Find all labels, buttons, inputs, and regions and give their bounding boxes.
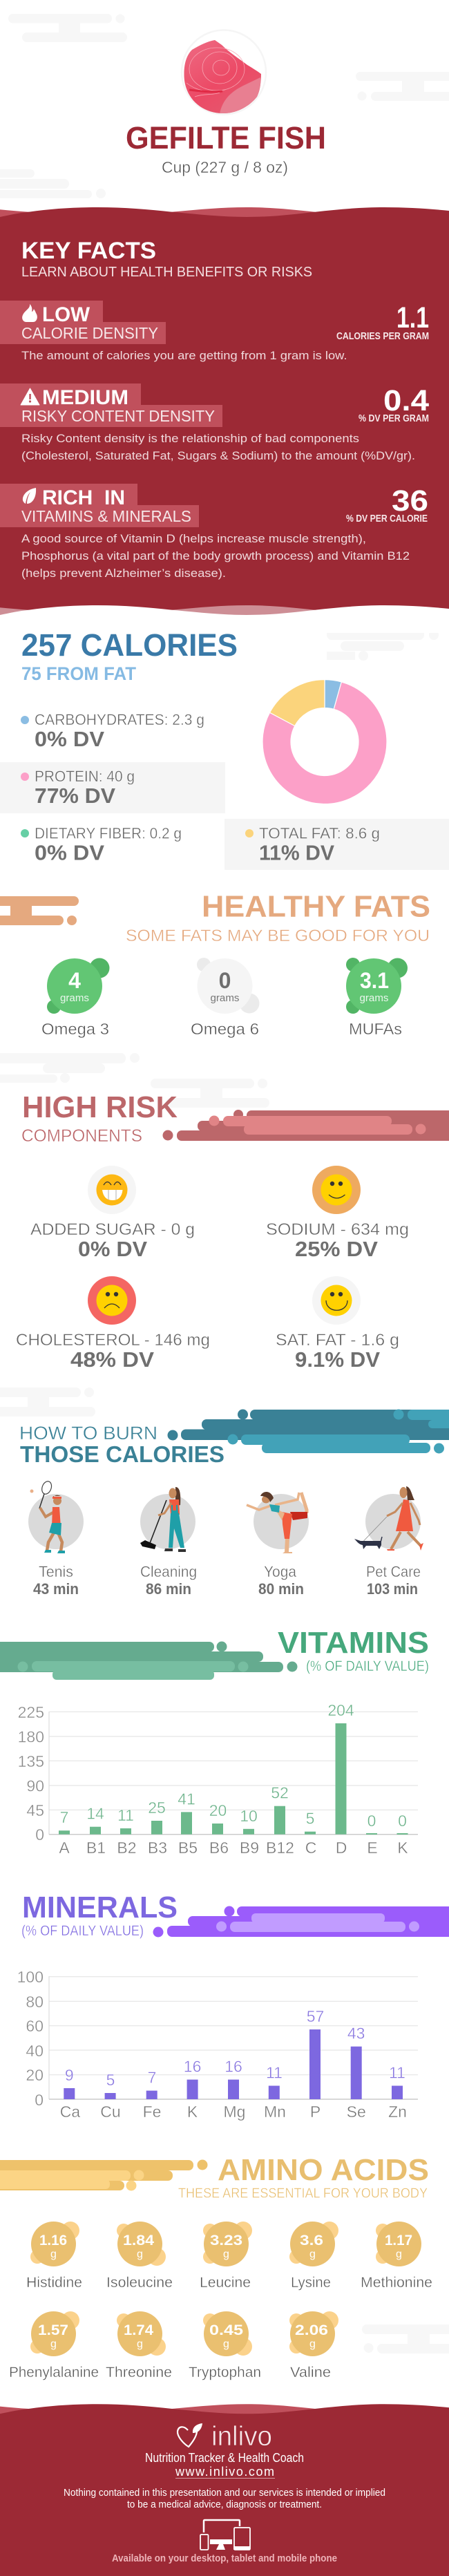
description [21,433,415,462]
icon: desktop, tablet and phone [200,2520,250,2550]
bar chart: vitamins: 20 [209,1801,227,1819]
amino acid: methionine: Methionine [361,2275,432,2291]
macro: carbohydrates: CARBOHYDRATES: 2.3 g [35,711,204,728]
amino acid: threonine: 1.74 [124,2322,153,2338]
activity: cleaning: 86 min [146,1580,191,1598]
amino acid: lysine [289,2222,338,2291]
decoration: green ribbon [0,1642,297,1680]
bar chart: vitamins: 10 [240,1807,258,1825]
subheading: (% OF DAILY VALUE) [21,1923,144,1939]
amino acid: leucine [200,2222,252,2291]
stat: added sugar [30,1166,195,1261]
bar chart: vitamins: 25 [148,1799,166,1817]
bar chart: minerals: 57 [307,2007,324,2025]
decoration: purple ribbon [153,1906,449,1938]
bar chart: vitamins: 90 [26,1777,44,1795]
icon: person in yoga pose [247,1492,307,1553]
activity: yoga: 80 min [258,1580,304,1598]
bar chart: minerals: 20 [26,2066,44,2084]
amino acid: histidine: Histidine [26,2275,82,2291]
logo: inlivo heart and wordmark: inlivo [211,2421,272,2452]
bar chart: minerals: Fe [143,2103,161,2121]
macro: dietary fiber: 0% DV [35,840,104,865]
bar chart: minerals: 40 [26,2042,44,2060]
label: calorie density: CALORIE DENSITY [21,324,158,342]
description [21,533,410,580]
rating: low: LOW [42,303,90,326]
bar chart: vitamins: 41 [178,1790,195,1808]
stat: saturated fat: SAT. FAT - 1.6 g [276,1331,399,1349]
amino acid: phenylalanine [9,2311,99,2380]
subheading: from fat: 75 FROM FAT [21,663,136,684]
activity: yoga [247,1492,309,1598]
bar chart: vitamins: 204 [327,1701,354,1719]
amino acid: tryptophan [189,2311,261,2380]
stat: sodium [266,1166,409,1261]
amino acid: histidine: g [50,2248,57,2260]
macro: carbohydrates [21,711,204,751]
activity: pet care [354,1486,423,1598]
stat: added sugar: ADDED SUGAR - 0 g [30,1220,195,1239]
icon: leaf [23,488,36,504]
amino acid: phenylalanine: g [50,2338,57,2350]
heading: 257 calories: 257 CALORIES [21,627,238,663]
bar chart: vitamins: 0 [398,1812,407,1830]
panel: calories [0,627,449,870]
bar chart: minerals: K [187,2103,198,2121]
panel: key facts [0,207,449,633]
bar chart: minerals: 100 [17,1968,44,1986]
amino acid: lysine: Lysine [291,2275,331,2291]
disclaimer [64,2487,385,2510]
bar chart: vitamins: B12 [266,1839,294,1857]
value: 0.4: 0.4 [383,384,429,417]
fact: risky content density [0,383,429,462]
disclaimer: Nothing contained in this presentation and our services is intended or implied [64,2487,385,2499]
amino acid: histidine: 1.16 [39,2233,67,2248]
unit: dv per calorie: % DV PER CALORIE [346,513,428,524]
macro: dietary fiber [21,825,182,865]
bar chart: vitamins: D [336,1839,347,1857]
amino acid: isoleucine [106,2222,173,2291]
icon: person walking dog [354,1486,423,1551]
bar chart: minerals: Mg [224,2103,245,2121]
stat: added sugar: 0% DV [78,1237,147,1261]
stat: omega 6: Omega 6 [191,1020,259,1038]
macro: total fat [224,819,449,870]
amino acid: tryptophan: Tryptophan [189,2365,261,2380]
tagline: Nutrition Tracker & Health Coach [145,2450,304,2465]
amino acid: leucine: Leucine [200,2275,251,2291]
bar chart: vitamins: 0 [367,1812,376,1830]
icon: big smile face [321,1285,352,1316]
description: A good source of Vitamin D (helps increase muscle strength), [21,533,366,545]
panel: vitamins [0,1626,429,1857]
amino acid: leucine: g [223,2248,229,2260]
description: (Cholesterol, Saturated Fat, Sugars & Sodium) to the amount (%DV/gr). [21,450,415,462]
macro: total fat: 11% DV [259,840,334,865]
rating: medium: MEDIUM [42,386,128,409]
amino acid: valine: Valine [290,2365,331,2380]
activity: tennis [28,1480,84,1598]
bar chart: minerals: 43 [347,2025,365,2043]
bar chart: vitamins: 45 [26,1801,44,1819]
bar chart: vitamins: 5 [306,1810,314,1828]
bar chart: vitamins: 52 [271,1784,289,1802]
stat: saturated fat: 9.1% DV [295,1347,380,1372]
icon: person sweeping [140,1487,186,1552]
bar chart: minerals: 7 [148,2069,156,2087]
icon: warning triangle [21,388,39,405]
decoration: orange ribbon [0,896,79,925]
decoration: yellow ribbon [0,2160,207,2190]
stat: omega 6: grams [210,992,239,1004]
bar chart: vitamins: B5 [178,1839,198,1857]
icon: fish photo [182,30,266,115]
stat: omega 3: Omega 3 [41,1020,109,1038]
macro: carbohydrates: 0% DV [35,727,104,751]
logo: inlivo heart and wordmark [178,2421,272,2452]
macro: dietary fiber: DIETARY FIBER: 0.2 g [35,825,182,842]
bar chart: minerals [17,1968,418,2121]
amino acid: methionine [361,2222,432,2291]
stat: sodium: SODIUM - 634 mg [266,1220,409,1239]
amino acid: lysine: g [309,2248,316,2260]
icon: tennis player [30,1480,65,1553]
amino acid: valine [289,2311,338,2380]
stat: cholesterol [16,1276,210,1372]
bar chart: minerals: 11 [389,2063,405,2081]
decoration: red ribbon [163,1110,449,1141]
bar chart: minerals: Mn [264,2103,286,2121]
bar chart: vitamins [18,1701,418,1857]
bar chart: minerals: 60 [26,2017,44,2035]
heading: healthy fats: HEALTHY FATS [202,890,430,923]
bar chart: vitamins: B9 [240,1839,259,1857]
amino acid: tryptophan: g [223,2338,229,2350]
bar chart: vitamins: 0 [35,1826,44,1844]
activity: yoga: Yoga [264,1563,297,1580]
stat: omega 3: 4 [68,968,81,993]
unit: calories per gram: CALORIES PER GRAM [336,331,429,342]
amino acid: isoleucine: g [137,2248,143,2260]
icon: grinning face [97,1175,127,1205]
activity: tennis: Tenis [39,1563,73,1580]
panel: footer [0,2404,449,2576]
subheading: (% OF DAILY VALUE) [306,1658,429,1674]
disclaimer: to be a medical advice, diagnosis or treatment. [127,2499,322,2510]
stat: cholesterol: CHOLESTEROL - 146 mg [16,1331,210,1349]
heading: high risk: HIGH RISK [22,1090,178,1124]
amino acid: isoleucine: Isoleucine [106,2275,173,2291]
amino acid: threonine [106,2311,172,2380]
subheading: THESE ARE ESSENTIAL FOR YOUR BODY [178,2186,428,2201]
stat: omega 6: 0 [219,968,231,993]
panel: minerals [17,1891,449,2121]
heading: vitamins: VITAMINS [278,1626,429,1660]
stat: sodium: 25% DV [295,1237,378,1261]
bar chart: vitamins: E [367,1839,378,1857]
heading line two: THOSE CALORIES [20,1442,224,1468]
bar chart: vitamins: C [305,1839,316,1857]
bar chart: minerals: 11 [266,2063,283,2081]
decoration: teal ribbon [167,1410,449,1454]
amino acid: histidine [26,2222,82,2291]
stat: omega 3: grams [60,992,89,1004]
availability note: Available on your desktop, tablet and mobile phone [112,2553,337,2564]
macro: protein [0,762,225,813]
stat: cholesterol: 48% DV [70,1347,154,1372]
bar chart: minerals: 9 [65,2066,74,2084]
heading line one: HOW TO BURN [19,1423,157,1443]
label: vitamins and minerals: VITAMINS & MINERALS [21,507,191,525]
icon: flame [22,304,37,322]
stat: mufas: grams [359,992,388,1004]
activity: pet care: Pet Care [366,1563,421,1580]
amino acid: methionine: g [396,2248,402,2260]
amino acid: threonine: Threonine [106,2365,172,2380]
activity: tennis: 43 min [33,1580,79,1598]
header: food photo, title and serving [126,30,326,176]
rating: rich in: RICH IN [42,486,125,509]
heading: amino acids: AMINO ACIDS [218,2153,429,2187]
description: (helps prevent Alzheimer’s disease). [21,567,226,580]
stat: saturated fat [276,1276,399,1372]
bar chart: vitamins: B3 [148,1839,167,1857]
stat: omega 3 [41,958,109,1038]
title: GEFILTE FISH [126,120,326,155]
macro: protein: PROTEIN: 40 g [35,768,135,785]
description: Risky Content density is the relationship of bad components [21,433,359,445]
heading: key facts: KEY FACTS [21,238,156,264]
amino acid: phenylalanine: Phenylalanine [9,2365,99,2380]
bar chart: minerals: 16 [224,2058,242,2076]
panel: how to burn those calories [19,1410,449,1598]
bar chart: vitamins: B1 [86,1839,106,1857]
bar chart: vitamins: B6 [209,1839,229,1857]
bar chart: minerals: Ca [60,2103,80,2121]
stat: mufas: MUFAs [349,1020,402,1038]
chart: macronutrient donut [262,680,387,804]
panel: healthy fats [0,890,430,1038]
value: 1.1: 1.1 [397,301,429,334]
fact: calorie density [0,301,429,362]
bar chart: minerals: 80 [26,1993,44,2011]
stat: mufas [346,958,408,1038]
bar chart: vitamins: 135 [18,1752,44,1770]
heading: minerals: MINERALS [22,1891,178,1924]
bar chart: minerals: 0 [35,2091,44,2109]
website link: www.inlivo.com [175,2465,274,2479]
bar chart: vitamins: A [59,1839,70,1857]
icon: smiling face [321,1175,352,1205]
macro: total fat: TOTAL FAT: 8.6 g [259,825,380,842]
activity: cleaning: Cleaning [140,1563,197,1580]
unit: dv per gram: % DV PER GRAM [359,413,429,424]
activity: cleaning [140,1487,197,1598]
value: 36: 36 [392,484,428,518]
bar chart: minerals: Cu [100,2103,121,2121]
bar chart: vitamins: 11 [117,1806,134,1824]
amino acid: isoleucine: 1.84 [123,2233,154,2248]
amino acid: leucine: 3.23 [210,2233,242,2248]
bar chart: vitamins: 180 [18,1727,44,1745]
bar chart: vitamins: 14 [86,1805,104,1823]
bar chart: minerals: Zn [388,2103,407,2121]
bar chart: vitamins: K [397,1839,408,1857]
subheading: components: COMPONENTS [21,1126,142,1146]
amino acid: threonine: g [137,2338,143,2350]
subheading: SOME FATS MAY BE GOOD FOR YOU [126,927,430,945]
subheading: LEARN ABOUT HEALTH BENEFITS OR RISKS [21,265,312,280]
bar chart: vitamins: B2 [117,1839,137,1857]
description: The amount of calories you are getting from 1 gram is low. [21,350,347,362]
bar chart: vitamins: 7 [60,1808,68,1826]
amino acid: tryptophan: 0.45 [209,2322,243,2338]
bar chart: minerals: 5 [106,2071,115,2089]
bar chart: minerals: Se [347,2103,366,2121]
stat: omega 6 [191,958,260,1038]
fact: rich in vitamins and minerals [0,484,428,580]
amino acid: valine: 2.06 [295,2322,328,2338]
amino acid: methionine: 1.17 [385,2233,412,2248]
label: risky content density: RISKY CONTENT DENSITY [21,407,215,425]
stat: mufas: 3.1 [360,968,389,993]
bar chart: minerals: P [310,2103,321,2121]
bar chart: minerals: 16 [184,2058,201,2076]
description: Phosphorus (a vital part of the body growth process) and Vitamin B12 [21,550,410,562]
bar chart: vitamins: 225 [18,1703,44,1721]
panel: amino acids [0,2153,432,2380]
icon: frowning face [97,1285,127,1316]
activity: pet care: 103 min [367,1580,418,1598]
serving size: Cup (227 g / 8 oz) [162,158,288,176]
macro: protein: 77% DV [35,784,115,808]
amino acid: valine: g [309,2338,316,2350]
panel: high risk components [16,1090,449,1372]
amino acid: phenylalanine: 1.57 [38,2322,68,2338]
amino acid: lysine: 3.6 [300,2233,323,2248]
